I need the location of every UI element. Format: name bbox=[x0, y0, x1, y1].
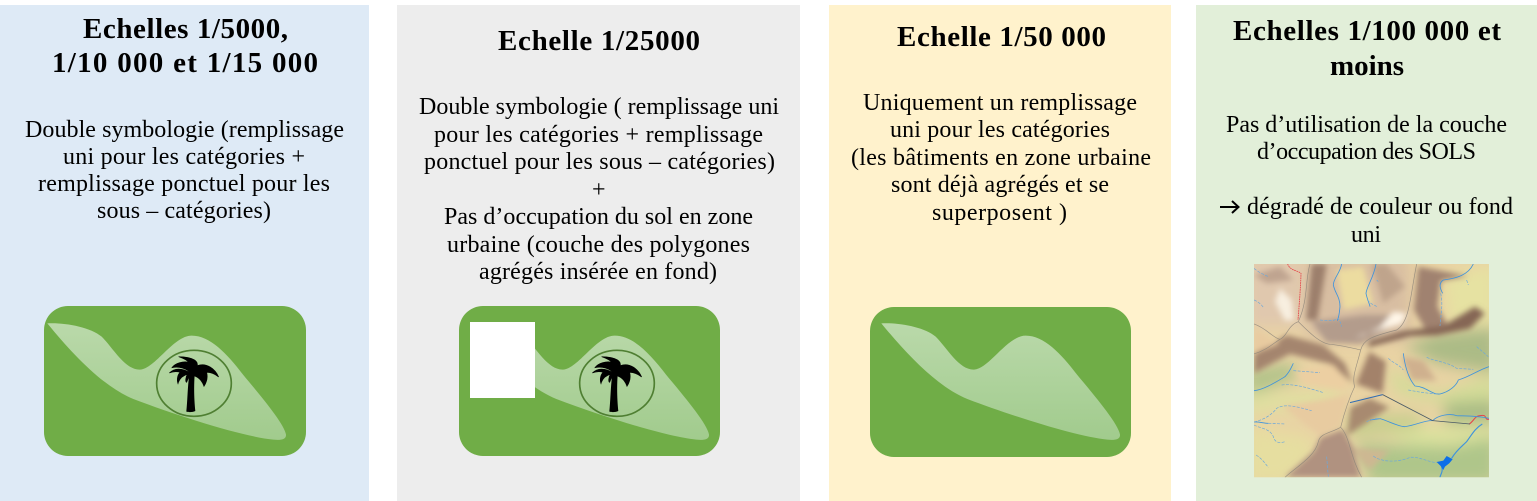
text block: double symbologie bbox=[25, 117, 344, 224]
text block: remplissage uni: superposent ) bbox=[932, 200, 1067, 226]
text block: remplissage uni bbox=[851, 90, 1151, 226]
text block: remplissage uni: (les bâtiments en zone urbaine bbox=[851, 145, 1151, 171]
heading: echelles 1/5000, 1/10 000 et 1/15 000: Echelles 1/5000, bbox=[83, 13, 288, 45]
panel: echelles 1/5000 a 1/15 000 bbox=[0, 5, 369, 501]
panel: echelle 1/25000 bbox=[397, 5, 800, 501]
text block: pas d'occupation des sols: Pas d’utilisation de la couche bbox=[1226, 112, 1507, 138]
panel: echelle 1/50 000 bbox=[829, 5, 1171, 501]
text block: double symbologie sans zone urbaine: Pas d’occupation du sol en zone bbox=[444, 204, 753, 230]
heading: echelle 1/50 000: Echelle 1/50 000 bbox=[897, 21, 1106, 53]
heading: echelles 1/100 000 et moins: Echelles 1/100 000 et bbox=[1233, 15, 1501, 47]
text block: remplissage uni: uni pour les catégories bbox=[890, 117, 1110, 143]
text block: double symbologie sans zone urbaine: Double symbologie ( remplissage uni bbox=[419, 94, 779, 120]
text block: pas d'occupation des sols: dégradé de couleur ou fond bbox=[1247, 194, 1513, 220]
text block: double symbologie sans zone urbaine: + bbox=[592, 177, 606, 203]
icon: green area without symbol bbox=[870, 307, 1131, 457]
text block: double symbologie: uni pour les catégories + bbox=[63, 144, 305, 170]
heading: echelle 1/25000: Echelle 1/25000 bbox=[498, 25, 700, 57]
arrow: consequence bbox=[1220, 201, 1238, 213]
heading: echelles 1/100 000 et moins bbox=[1233, 15, 1501, 82]
text block: double symbologie: remplissage ponctuel pour les bbox=[38, 171, 330, 197]
text block: double symbologie sans zone urbaine: agrégés insérée en fond) bbox=[479, 259, 717, 285]
text block: double symbologie sans zone urbaine bbox=[419, 94, 779, 285]
text block: double symbologie sans zone urbaine: urbaine (couche des polygones bbox=[447, 232, 750, 258]
text block: remplissage uni: sont déjà agrégés et se bbox=[891, 172, 1109, 198]
text block: double symbologie: sous – catégories) bbox=[97, 198, 271, 224]
text block: double symbologie sans zone urbaine: pour les catégories + remplissage bbox=[434, 122, 763, 148]
text block: pas d'occupation des sols: d’occupation des SOLS bbox=[1257, 139, 1476, 165]
heading: echelles 1/100 000 et moins: moins bbox=[1330, 50, 1404, 82]
panel: echelles 1/100 000 et moins bbox=[1196, 5, 1537, 501]
heading: echelles 1/5000, 1/10 000 et 1/15 000: 1/10 000 et 1/15 000 bbox=[52, 47, 318, 79]
text block: remplissage uni: Uniquement un remplissage bbox=[863, 90, 1137, 116]
heading: echelles 1/5000, 1/10 000 et 1/15 000 bbox=[52, 13, 318, 79]
icon: green area with palm symbol bbox=[44, 306, 306, 456]
map: shaded relief with rivers bbox=[1254, 264, 1489, 478]
icon: green area with palm symbol and white urban block bbox=[459, 306, 720, 456]
text block: double symbologie sans zone urbaine: ponctuel pour les sous – catégories) bbox=[424, 149, 775, 175]
text block: double symbologie: Double symbologie (remplissage bbox=[25, 117, 344, 143]
text block: pas d'occupation des sols: uni bbox=[1351, 222, 1381, 248]
text block: pas d'occupation des sols bbox=[1226, 112, 1513, 248]
